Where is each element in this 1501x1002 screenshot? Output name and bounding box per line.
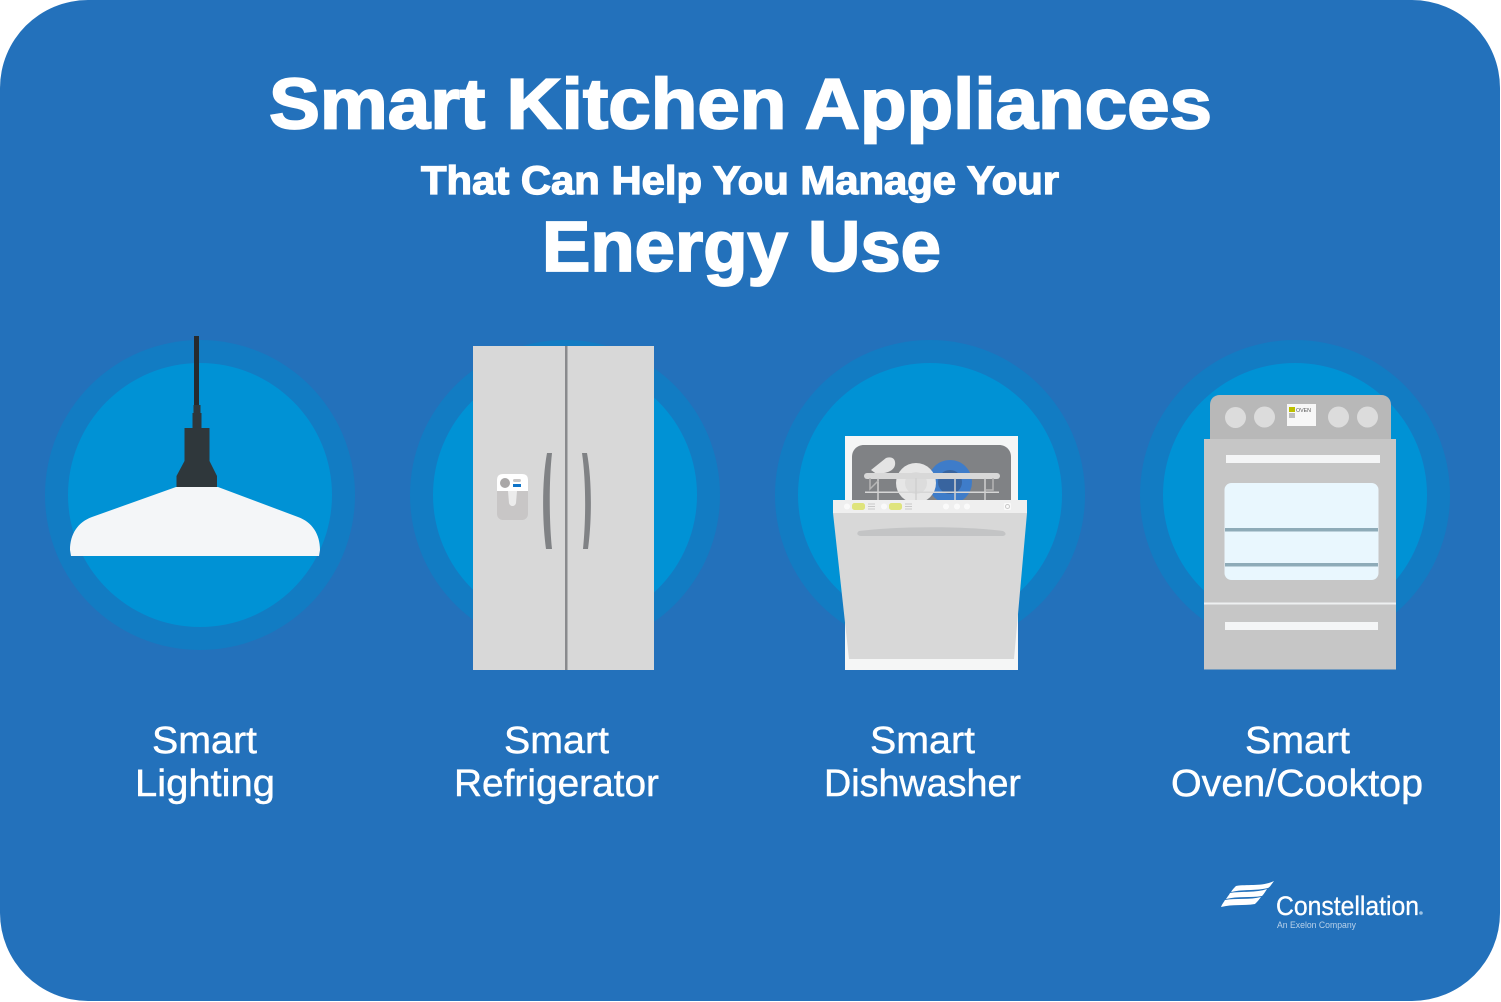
logo: Constellation: An Exelon Company (1277, 920, 1356, 930)
icon: smart oven/cooktop (1140, 340, 1450, 670)
label: smart oven/cooktop (1171, 720, 1423, 805)
logo: Constellation: Constellation (1276, 891, 1419, 921)
icon: smart lighting (45, 336, 355, 650)
title: That Can Help You Manage Your (421, 159, 1059, 203)
icon: smart refrigerator (410, 340, 720, 670)
label: smart refrigerator (454, 720, 659, 805)
title: Energy Use (542, 208, 941, 287)
label: smart oven/cooktop: Oven/Cooktop (1171, 763, 1423, 805)
logo: Constellation (1221, 881, 1423, 930)
label: smart lighting: Smart (152, 720, 257, 762)
label: smart lighting: Lighting (135, 763, 275, 805)
label: smart dishwasher: Dishwasher (824, 763, 1021, 805)
label: smart refrigerator: Smart (504, 720, 609, 762)
icon: smart oven/cooktop: OVEN (1296, 408, 1311, 414)
label: smart dishwasher (824, 720, 1021, 805)
label: smart lighting (135, 720, 275, 805)
icon: smart dishwasher (775, 340, 1085, 670)
title (269, 66, 1212, 287)
label: smart oven/cooktop: Smart (1245, 720, 1350, 762)
label: smart refrigerator: Refrigerator (454, 763, 659, 805)
label: smart dishwasher: Smart (870, 720, 975, 762)
title: Smart Kitchen Appliances (269, 66, 1212, 144)
